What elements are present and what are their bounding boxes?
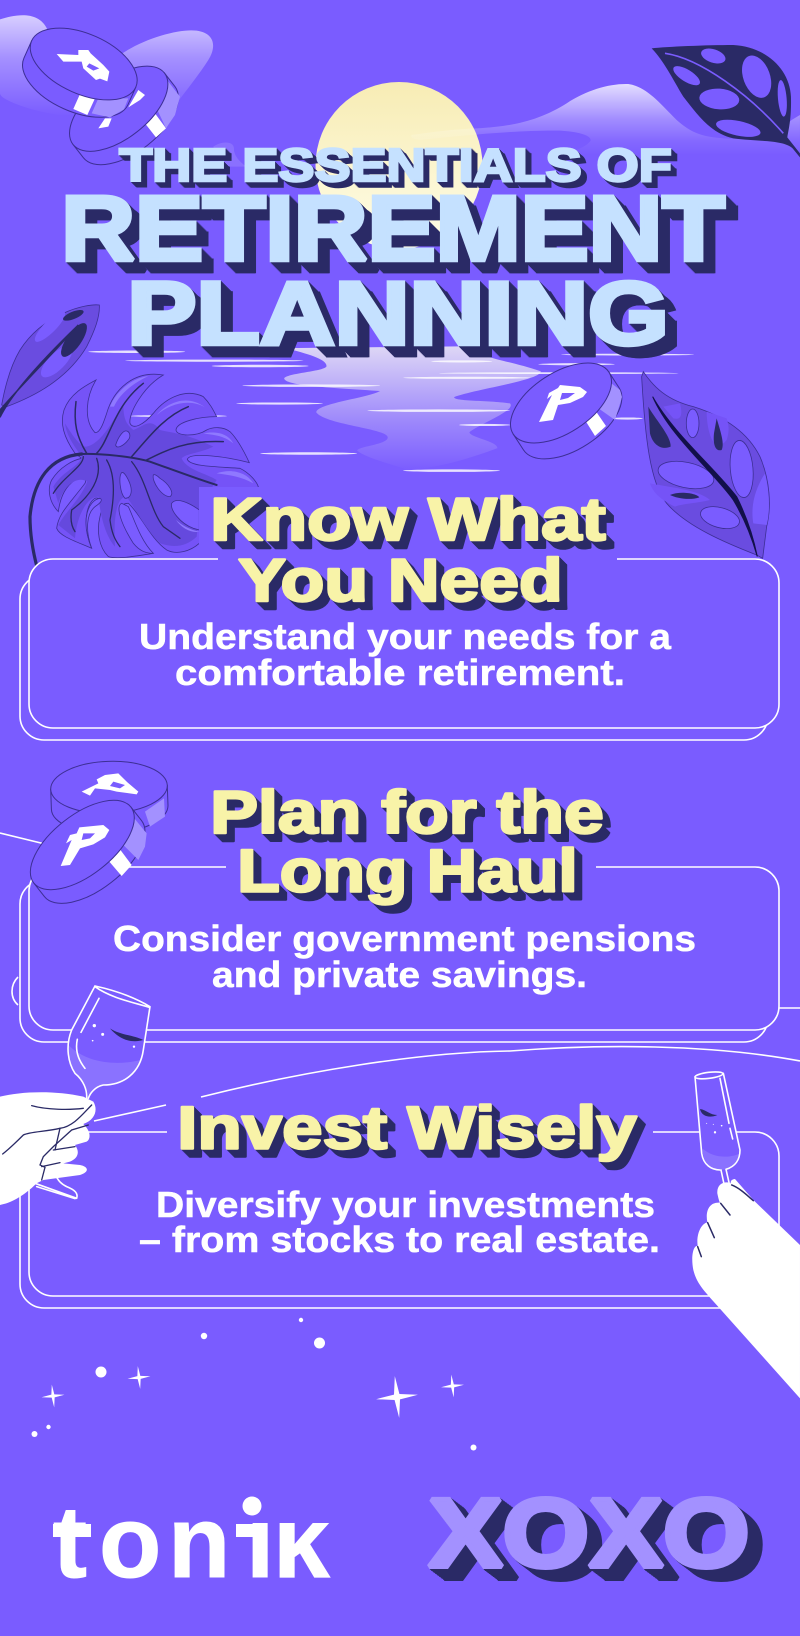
illustration: small left leaf xyxy=(0,305,99,417)
decorative line: left arc fragment xyxy=(12,977,18,1005)
decorative line: right fragment xyxy=(775,1007,800,1009)
text: know what you need description: comfortable retirement. xyxy=(175,652,625,693)
illustration: right hand with champagne flute xyxy=(692,1071,800,1398)
illustration: coin behind, top left xyxy=(55,50,193,181)
decorative sparkles and dots xyxy=(32,1318,476,1450)
title: RETIREMENT xyxy=(61,178,725,280)
illustration: sun xyxy=(316,82,482,249)
panel: plan for the long haul xyxy=(20,790,779,1042)
heading: plan for the long haul: Long Haul xyxy=(237,837,578,904)
title: THE ESSENTIALS OF xyxy=(119,139,672,191)
text: know what you need description xyxy=(139,616,672,693)
text: plan for the long haul description: Consider government pensions xyxy=(113,918,696,959)
illustration: right leaf xyxy=(642,372,769,558)
title: PLANNING xyxy=(127,263,669,363)
heading: plan for the long haul xyxy=(210,779,604,904)
text: invest wisely description: – from stocks to real estate. xyxy=(139,1219,660,1260)
illustration: left hills xyxy=(0,15,247,167)
panel: know what you need xyxy=(20,487,779,740)
decorative line: upper left fragment xyxy=(0,833,45,844)
heading: plan for the long haul: Plan for the xyxy=(210,779,604,846)
logo: xoxo: XOXO xyxy=(428,1478,750,1588)
illustration: coin over water xyxy=(497,347,635,475)
illustration: dark leaf xyxy=(652,45,800,157)
illustration: water streaks xyxy=(88,350,694,472)
text: invest wisely description xyxy=(139,1184,660,1260)
illustration: coin front, top left xyxy=(12,13,148,132)
decorative line: sweeping curve xyxy=(94,1047,800,1121)
heading: know what you need xyxy=(210,486,606,614)
text: know what you need description: Understand your needs for a xyxy=(139,616,672,657)
illustration: right hills xyxy=(411,84,800,155)
illustration: coin pair over second panel xyxy=(15,759,169,920)
heading: invest wisely: Invest Wisely xyxy=(177,1094,637,1161)
heading: know what you need: You Need xyxy=(238,547,563,614)
text: plan for the long haul description xyxy=(113,918,696,995)
logo: tonik: tonik xyxy=(53,1485,330,1599)
illustration: left hand with wine glass xyxy=(0,986,150,1205)
illustration: water reflection xyxy=(284,346,541,470)
illustration: monstera leaf xyxy=(30,374,258,568)
panel: invest wisely xyxy=(20,1100,779,1308)
text: plan for the long haul description: and private savings. xyxy=(212,954,587,995)
text: invest wisely description: Diversify your investments xyxy=(156,1184,655,1225)
heading: know what you need: Know What xyxy=(210,486,606,553)
title xyxy=(61,139,725,363)
